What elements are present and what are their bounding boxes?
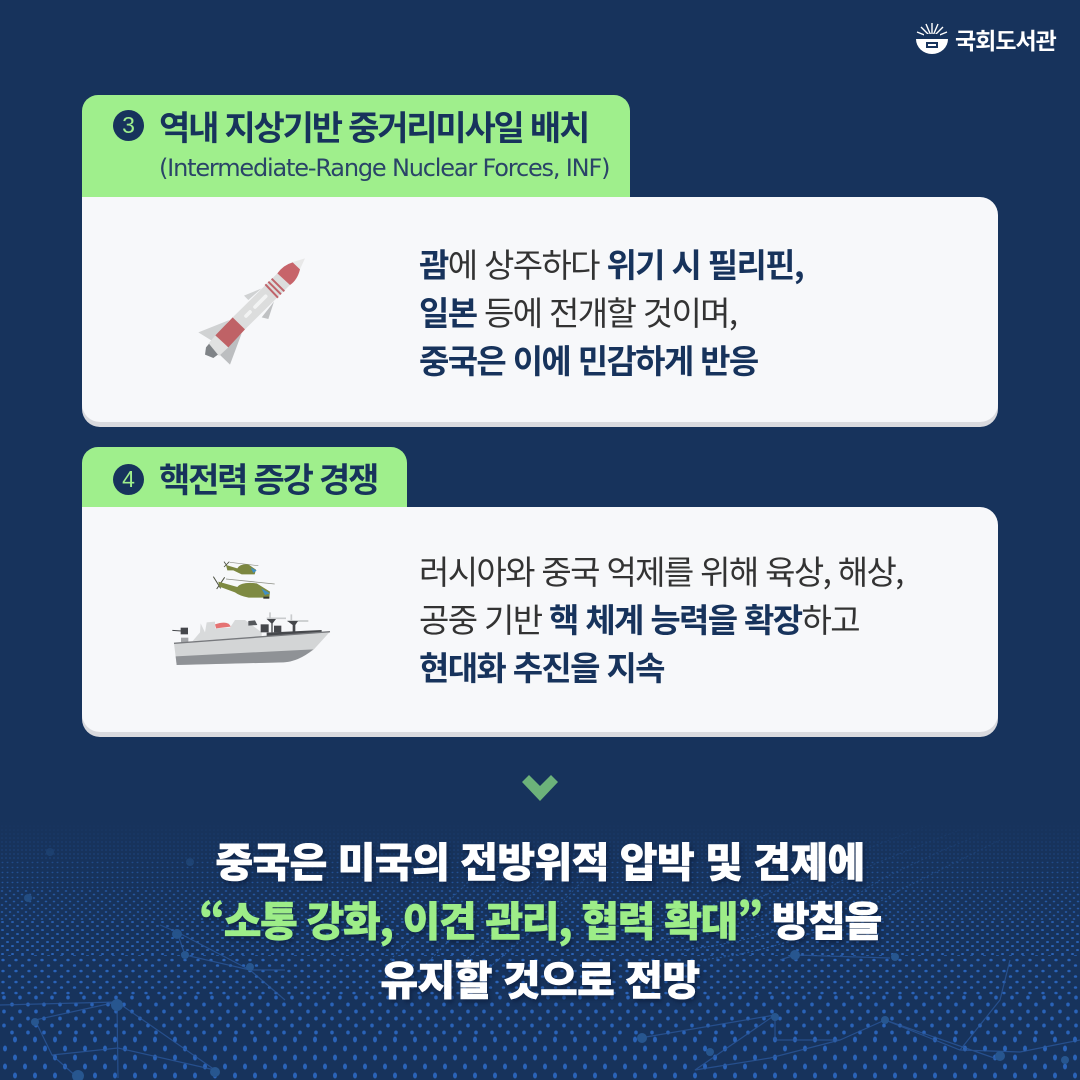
panel 4: body text: 러시아와 중국 억제를 위해 육상, 해상, bbox=[419, 546, 903, 594]
panel 3: tab heading bbox=[82, 95, 630, 197]
heading 3: 역내 지상기반 중거리미사일 배치 bbox=[159, 101, 588, 150]
icon: missile bbox=[198, 258, 305, 364]
icon: helicopters and warship bbox=[172, 561, 330, 665]
panel 3: body text: 괌에 상주하다 위기 시 필리핀, bbox=[419, 239, 803, 287]
background: dot and network pattern bbox=[0, 830, 1080, 1080]
panel 3: body text: 중국은 이에 민감하게 반응 bbox=[419, 335, 758, 383]
conclusion text bbox=[199, 829, 884, 1007]
panel 3: body text bbox=[419, 239, 803, 383]
number badge 3: 3 bbox=[122, 112, 135, 138]
number badge 4 bbox=[113, 464, 144, 495]
conclusion line 3: 유지할 것으로 전망 bbox=[380, 947, 700, 1007]
heading 4: 핵전력 증강 경쟁 bbox=[159, 453, 377, 502]
panel 4: body text bbox=[419, 546, 903, 690]
conclusion line 1: 중국은 미국의 전방위적 압박 및 견제에 bbox=[215, 829, 865, 889]
panel 3: body text: 일본 등에 전개할 것이며, bbox=[419, 287, 736, 335]
logo wordmark: 국회도서관 bbox=[955, 22, 1056, 56]
subheading INF: (Intermediate-Range Nuclear Forces, INF) bbox=[159, 154, 609, 182]
panel 4: tab heading bbox=[82, 447, 407, 507]
conclusion line 2: “소통 강화, 이견 관리, 협력 확대” 방침을 bbox=[199, 888, 881, 948]
logo emblem bbox=[916, 23, 948, 54]
panel 3: card bbox=[82, 197, 998, 422]
panel 4: body text: 현대화 추진을 지속 bbox=[419, 642, 664, 690]
arrow: chevron down bbox=[522, 775, 558, 801]
number badge 4: 4 bbox=[122, 466, 135, 492]
panel 4: card bbox=[82, 507, 998, 732]
number badge 3 bbox=[113, 110, 144, 141]
panel 4: body text: 공중 기반 핵 체계 능력을 확장하고 bbox=[419, 594, 859, 642]
logo: National Assembly Library bbox=[916, 22, 1056, 56]
